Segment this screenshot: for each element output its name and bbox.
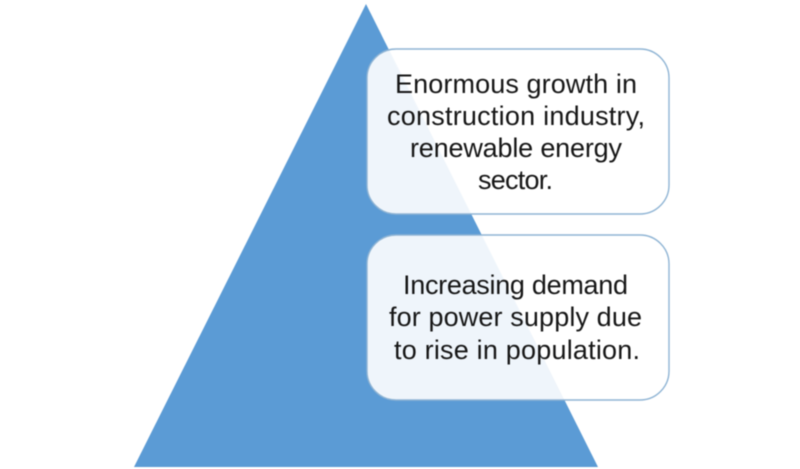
text block: growth: renewable energy [410, 133, 622, 163]
panel: construction and renewable energy growth [367, 49, 669, 214]
text block: growth: construction industry, [387, 101, 645, 131]
text block: growth: sector. [478, 165, 553, 195]
text block: growth: Enormous growth in [395, 69, 637, 99]
pyramid triangle [134, 4, 598, 467]
text block: demand: Increasing demand [403, 270, 628, 300]
text block: demand: for power supply due [389, 302, 642, 332]
text block: demand: to rise in population. [394, 335, 640, 365]
text block: demand [389, 270, 642, 365]
panel: rising power demand [367, 235, 669, 400]
panel background [367, 49, 669, 214]
panel background [367, 235, 669, 400]
text block: growth [387, 69, 645, 195]
